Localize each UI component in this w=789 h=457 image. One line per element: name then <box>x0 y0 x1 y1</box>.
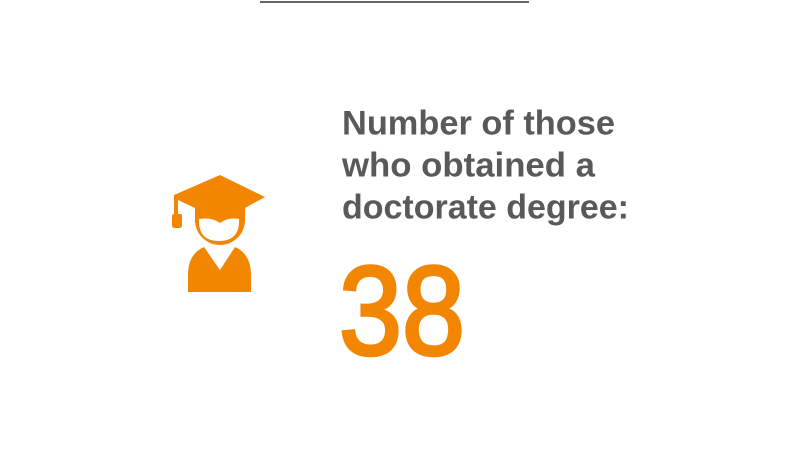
mortarboard cap <box>174 175 265 222</box>
icon: graduate with mortarboard <box>172 175 265 292</box>
heading text: Number of those <box>342 104 615 142</box>
body <box>188 247 251 292</box>
face ring <box>195 215 245 245</box>
heading text <box>341 104 629 226</box>
heading text: doctorate degree: <box>342 188 629 226</box>
number 38: 38 <box>339 240 465 382</box>
heading text: who obtained a <box>341 146 596 184</box>
tassel <box>172 214 182 228</box>
